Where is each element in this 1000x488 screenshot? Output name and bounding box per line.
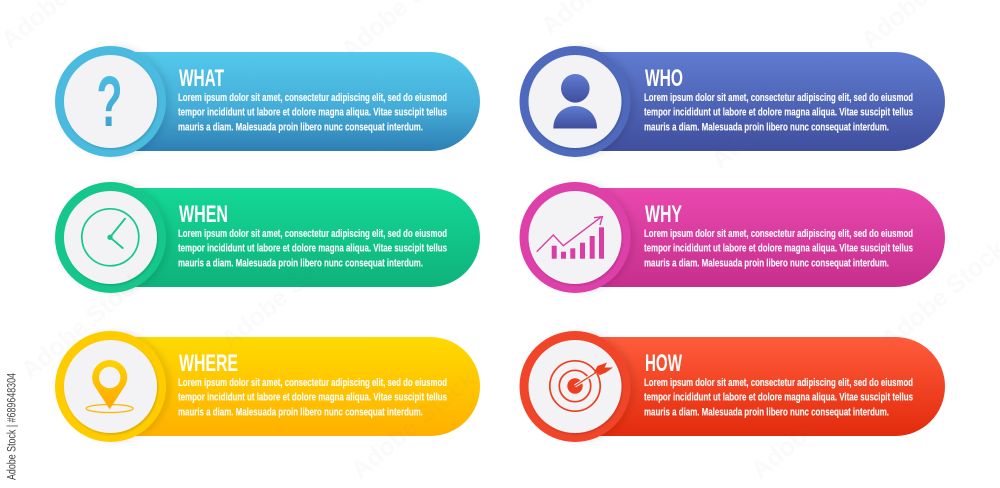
icon: person [553,74,597,128]
who heading: WHO [645,65,683,92]
who badge ring [520,46,630,157]
watermark: Adobe Stock [216,235,351,355]
why heading: WHY [645,201,682,228]
why badge disc [528,191,622,284]
icon: question mark: ? [96,63,123,142]
watermark: Adobe Stock [346,365,481,485]
who text [644,92,913,134]
why text: mauris a diam. Malesuada proin libero nunc consequat interdum. [644,258,889,270]
how text [644,377,913,418]
card: who [520,46,945,157]
watermark: Adobe Stock [706,55,841,175]
where text: Lorem ipsum dolor sit amet, consectetur adipiscing elit, sed do eiusmod [178,377,447,389]
where text: tempor incididunt ut labore et dolore magna aliqua. Vitae suscipit tellus [178,392,447,404]
when badge disc [64,191,157,284]
how text: mauris a diam. Malesuada proin libero nunc consequat interdum. [644,406,889,418]
when text: tempor incididunt ut labore et dolore magna aliqua. Vitae suscipit tellus [178,242,447,254]
when text: mauris a diam. Malesuada proin libero nunc consequat interdum. [178,258,423,270]
icon: growth chart [537,217,604,259]
what text: Lorem ipsum dolor sit amet, consectetur adipiscing elit, sed do eiusmod [178,92,447,104]
stock credit: Adobe Stock | #689648304 [6,373,18,480]
what badge ring [55,46,166,157]
what text [178,92,447,134]
watermark: Adobe Stock [16,265,151,385]
what text: mauris a diam. Malesuada proin libero nunc consequat interdum. [178,122,423,134]
where badge disc [64,340,157,433]
card: what [55,46,480,157]
when text [178,228,447,270]
when pill [110,188,480,287]
watermark: Adobe Stock [746,365,881,485]
how badge disc [528,340,622,433]
how pill [575,337,945,436]
icon: location pin [86,360,133,412]
what text: tempor incididunt ut labore et dolore magna aliqua. Vitae suscipit tellus [178,106,447,118]
icon: target with arrow [550,361,613,411]
where heading: WHERE [179,350,238,377]
who badge disc [528,55,622,148]
what pill [110,52,480,151]
where text [178,377,447,418]
card: when [55,182,480,293]
how badge ring [520,331,630,442]
who text: mauris a diam. Malesuada proin libero nunc consequat interdum. [644,122,889,134]
who pill [575,52,945,151]
why text [644,228,913,270]
card: how [520,331,945,442]
where badge ring [55,331,166,442]
when text: Lorem ipsum dolor sit amet, consectetur adipiscing elit, sed do eiusmod [178,228,447,240]
why pill [575,188,945,287]
when heading: WHEN [179,201,228,228]
card: where [55,331,480,442]
how heading: HOW [645,350,682,377]
why badge ring [520,182,630,293]
where text: mauris a diam. Malesuada proin libero nunc consequat interdum. [178,406,423,418]
icon: clock [82,209,139,266]
what heading: WHAT [179,65,224,92]
when badge ring [55,182,166,293]
where pill [110,337,480,436]
card: why [520,182,945,293]
what badge disc [64,55,157,148]
